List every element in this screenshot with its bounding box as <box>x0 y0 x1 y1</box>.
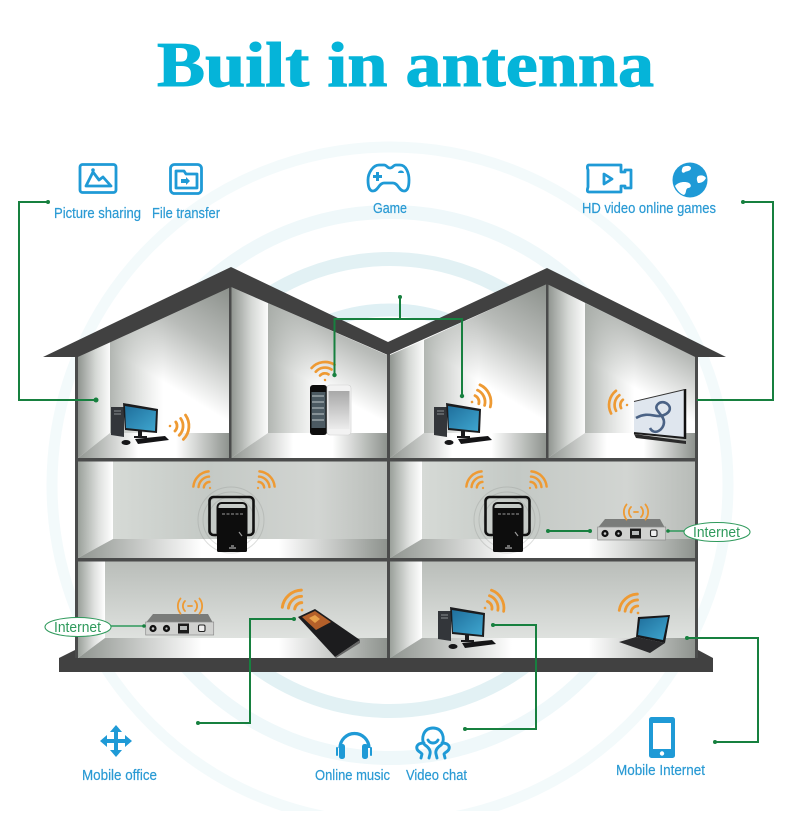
icon: video camera <box>587 165 631 192</box>
second desktop computer <box>434 383 494 445</box>
label: mobile internet: Mobile Internet <box>616 763 705 779</box>
attic room 4 <box>548 284 695 458</box>
title: Built in antenna <box>157 29 654 100</box>
right router <box>598 504 666 540</box>
ground floor rooms <box>78 561 695 658</box>
base slab <box>59 650 713 672</box>
middle floor rooms <box>78 461 695 558</box>
attic room 3 <box>390 284 546 458</box>
background signal arcs <box>52 147 728 818</box>
laptop <box>616 591 670 653</box>
roof <box>43 267 726 357</box>
left desktop computer <box>111 403 190 445</box>
label: picture sharing: Picture sharing <box>54 206 141 222</box>
right wifi extender <box>464 469 549 553</box>
television <box>607 389 686 444</box>
icon: game controller <box>368 165 409 191</box>
icon: headphones <box>336 734 372 759</box>
internet badge left <box>45 618 146 636</box>
icon: globe <box>672 162 708 198</box>
icon: video chat <box>417 728 449 758</box>
third desktop computer <box>438 588 507 649</box>
smartphones <box>310 361 351 435</box>
connector: game to phone and computer <box>332 295 464 398</box>
connector: video to television <box>697 200 773 400</box>
internet badge left: Internet <box>54 619 102 636</box>
icon: move arrows <box>100 725 132 757</box>
house walls and floors <box>75 282 698 659</box>
label: file transfer: File transfer <box>152 206 220 222</box>
connector: mobile internet to laptop <box>685 636 758 744</box>
label: hd video online games: HD video online games <box>582 201 716 217</box>
media tablet <box>279 587 360 658</box>
icon: file transfer <box>170 164 202 194</box>
connector: picture sharing to left room <box>19 200 98 402</box>
connector: extender to router <box>546 529 592 533</box>
icon: picture sharing <box>80 164 116 192</box>
icon: mobile phone <box>649 717 675 758</box>
house <box>43 267 726 672</box>
label: video chat: Video chat <box>406 768 467 784</box>
connector: mobile office to tablet <box>196 617 296 725</box>
left wifi extender <box>191 469 277 553</box>
attic room 2 <box>231 287 387 458</box>
internet badge right <box>666 522 750 542</box>
internet badge right: Internet <box>693 524 741 541</box>
label: online music: Online music <box>315 768 390 784</box>
connector: chat to computer <box>463 623 536 731</box>
label: mobile office: Mobile office <box>82 768 157 784</box>
attic room 1 <box>78 287 229 458</box>
label: game: Game <box>373 201 407 217</box>
left router <box>146 598 214 635</box>
